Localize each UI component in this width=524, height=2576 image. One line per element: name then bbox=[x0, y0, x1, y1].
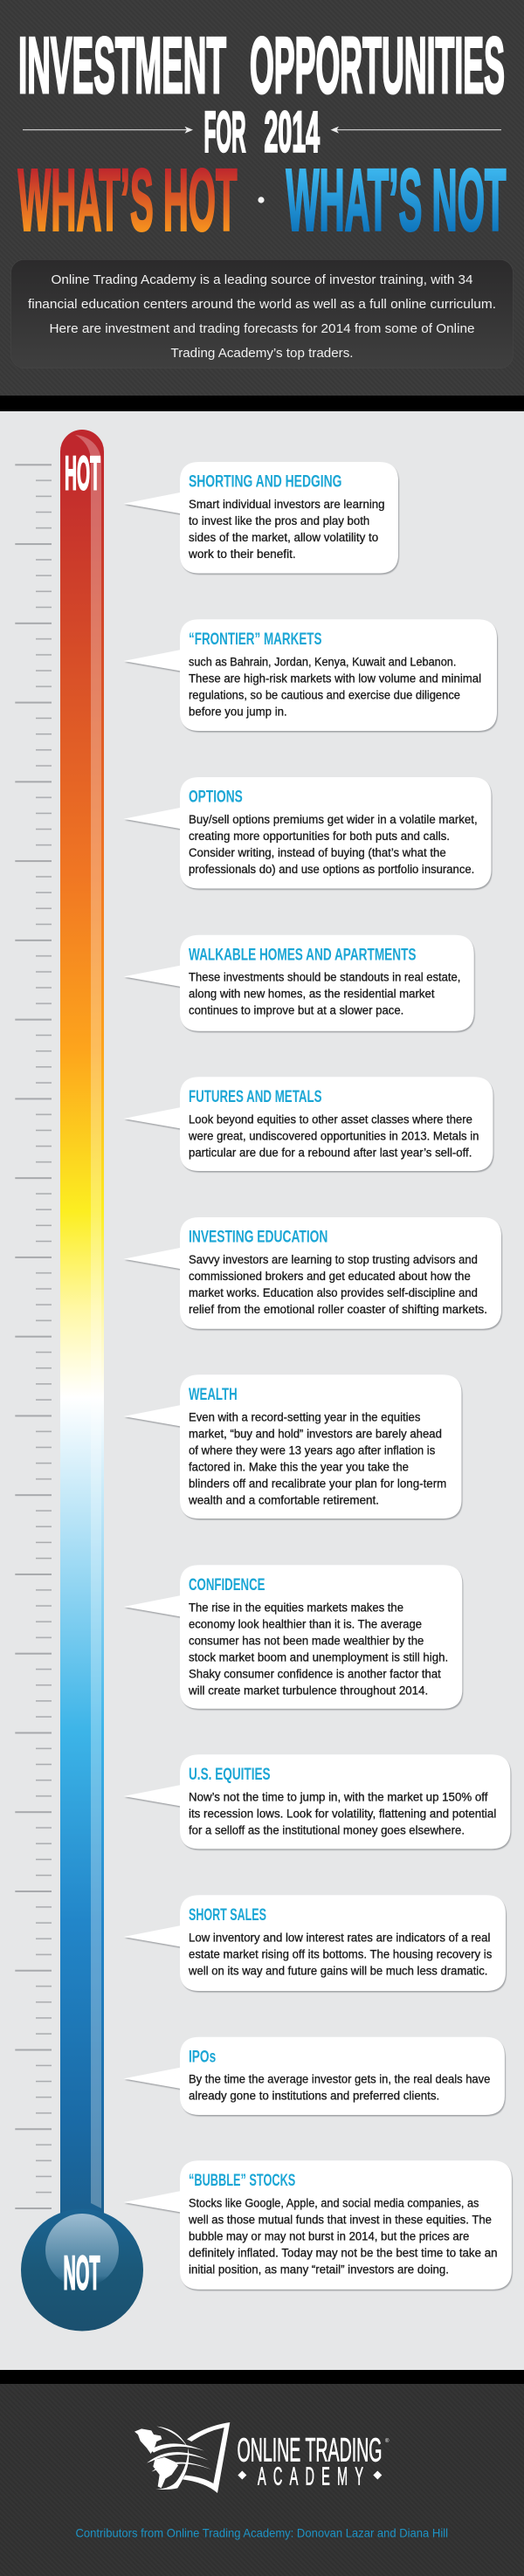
body: Even with a record-setting year in the equities bbox=[189, 1410, 421, 1423]
thermometer: NOT bbox=[63, 2247, 100, 2300]
bubble bbox=[124, 462, 398, 573]
logo subline: ACADEMY bbox=[258, 2462, 363, 2490]
body bbox=[188, 2196, 498, 2276]
body: Consider writing, instead of buying (that’s what the bbox=[189, 846, 446, 859]
bubble bbox=[124, 935, 474, 1031]
body: continues to improve but at a slower pace. bbox=[189, 1004, 403, 1017]
heading: SHORTING AND HEDGING bbox=[189, 473, 342, 492]
thermometer tube bbox=[60, 430, 104, 2227]
body: particular are due for a rebound after last year’s sell-off. bbox=[189, 1146, 472, 1159]
body: wealth and a comfortable retirement. bbox=[188, 1493, 379, 1506]
body bbox=[189, 2073, 490, 2103]
body: These investments should be standouts in real estate, bbox=[189, 971, 460, 984]
heading: CONFIDENCE bbox=[189, 1576, 265, 1595]
text: 2014 bbox=[264, 100, 320, 164]
body: work to their benefit. bbox=[188, 548, 296, 561]
body: professionals do) and use options as portfolio insurance. bbox=[189, 863, 474, 876]
body: These are high-risk markets with low volume and minimal bbox=[189, 672, 481, 685]
separator dot bbox=[258, 196, 265, 203]
callout: bubble stocks bbox=[124, 2160, 512, 2290]
bubble bbox=[124, 2037, 505, 2115]
body: of where they were 13 years ago after inflation is bbox=[189, 1443, 436, 1457]
body bbox=[189, 971, 460, 1017]
body: market works. Education also provides self-discipline and bbox=[189, 1286, 478, 1299]
body: Buy/sell options premiums get wider in a volatile market, bbox=[189, 813, 478, 826]
body: well on its way and future gains will be much less dramatic. bbox=[188, 1964, 487, 1977]
body: well as those mutual funds that invest in these equities. The bbox=[188, 2213, 492, 2226]
bubble bbox=[124, 1077, 493, 1171]
callout: investing education bbox=[124, 1217, 501, 1329]
body: Now’s not the time to jump in, with the market up 150% off bbox=[189, 1790, 488, 1803]
heading: U.S. EQUITIES bbox=[189, 1766, 271, 1784]
body: definitely inflated. Today may not be the best time to take an bbox=[189, 2246, 498, 2259]
bubble bbox=[124, 2160, 512, 2290]
body: The rise in the equities markets makes the bbox=[189, 1601, 403, 1614]
heading: SHORT SALES bbox=[189, 1906, 266, 1925]
intro panel bbox=[11, 259, 513, 368]
tube highlight bbox=[75, 435, 101, 2208]
heading: FUTURES AND METALS bbox=[189, 1088, 322, 1106]
body: along with new homes, as the residential market bbox=[189, 988, 435, 1001]
body: By the time the average investor gets in, the real deals have bbox=[189, 2073, 490, 2086]
title: investment opportunities: INVESTMENT bbox=[18, 22, 226, 110]
body bbox=[188, 498, 384, 561]
intro text: Trading Academy’s top traders. bbox=[171, 346, 353, 361]
bubble bbox=[124, 1217, 501, 1329]
contributors credit: Contributors from Online Trading Academy: Donovan Lazar and Diana Hill bbox=[75, 2526, 448, 2540]
body: its recession lows. Look for volatility, flattening and potential bbox=[189, 1807, 496, 1820]
body: initial position, as many “retail” investors are doing. bbox=[189, 2263, 449, 2276]
body: Shaky consumer confidence is another factor that bbox=[189, 1667, 441, 1680]
body: economy look healthier than it is. The average bbox=[189, 1617, 422, 1630]
callout: frontier markets bbox=[124, 619, 497, 731]
body: for a selloff as the institutional money goes elsewhere. bbox=[189, 1823, 465, 1836]
body: creating more opportunities for both puts and calls. bbox=[189, 830, 450, 843]
body: consumer has not been made wealthier by the bbox=[189, 1634, 424, 1647]
body bbox=[188, 1410, 446, 1506]
body: estate market rising off its bottoms. The housing recovery is bbox=[189, 1947, 493, 1960]
thermometer: HOT bbox=[65, 447, 100, 500]
heading: OPTIONS bbox=[189, 789, 243, 807]
header band bbox=[0, 0, 524, 411]
intro text bbox=[28, 272, 496, 361]
body: blinders off and recalibrate your plan for long-term bbox=[189, 1477, 446, 1490]
body bbox=[188, 1112, 479, 1159]
bubble bbox=[124, 1374, 461, 1519]
callout: futures and metals bbox=[124, 1077, 493, 1171]
body bbox=[189, 1253, 487, 1316]
body: sides of the market, allow volatility to bbox=[189, 531, 378, 544]
callout: wealth bbox=[124, 1374, 461, 1519]
diamond left bbox=[238, 2471, 246, 2480]
callout: short sales bbox=[124, 1895, 506, 1991]
body: Smart individual investors are learning bbox=[189, 498, 384, 511]
body: factored in. Make this the year you take the bbox=[189, 1460, 409, 1473]
thermometer bbox=[21, 430, 143, 2331]
body: were great, undiscovered opportunities in 2013. Metals in bbox=[188, 1129, 479, 1142]
body bbox=[188, 1601, 448, 1697]
logo: online trading academy bbox=[134, 2422, 390, 2493]
body: already gone to institutions and preferred clients. bbox=[189, 2090, 439, 2103]
bubble bbox=[124, 1565, 462, 1709]
heading: IPOs bbox=[189, 2048, 216, 2066]
thermometer bulb bbox=[21, 2209, 143, 2331]
callout: u.s. equities bbox=[124, 1754, 510, 1849]
intro text: Here are investment and trading forecasts for 2014 from some of Online bbox=[49, 321, 475, 336]
body bbox=[188, 1931, 493, 1977]
heading: INVESTING EDUCATION bbox=[189, 1229, 328, 1247]
bubble bbox=[124, 1754, 510, 1849]
callout: shorting and hedging bbox=[124, 462, 398, 573]
body: Look beyond equities to other asset classes where there bbox=[189, 1112, 472, 1126]
body: before you jump in. bbox=[189, 705, 287, 718]
body: commissioned brokers and get educated about how the bbox=[189, 1270, 471, 1283]
arrow: right bbox=[330, 127, 501, 134]
icon: open book and globe bbox=[134, 2422, 230, 2493]
subtitle: for 2014: FOR bbox=[204, 100, 246, 164]
callout: walkable homes and apartments bbox=[124, 935, 474, 1031]
logo wordmark: ONLINE TRADING bbox=[238, 2433, 383, 2469]
arrow: left bbox=[23, 127, 193, 134]
body: regulations, so be cautious and exercise due diligence bbox=[189, 688, 460, 701]
callout: confidence bbox=[124, 1565, 462, 1709]
bubble bbox=[124, 619, 497, 731]
body bbox=[189, 813, 478, 876]
bubble bbox=[124, 1895, 506, 1991]
bulb highlight bbox=[45, 2214, 119, 2287]
body: to invest like the pros and play both bbox=[189, 514, 369, 527]
bubble bbox=[124, 777, 491, 889]
registered mark: ® bbox=[385, 2438, 390, 2444]
callout: ipos bbox=[124, 2037, 505, 2115]
callout: options bbox=[124, 777, 491, 889]
body: stock market boom and unemployment is still high. bbox=[189, 1650, 448, 1663]
body bbox=[189, 655, 481, 718]
thermometer scale ticks bbox=[0, 464, 52, 2210]
body: relief from the emotional roller coaster of shifting markets. bbox=[189, 1303, 487, 1316]
diamond right bbox=[373, 2471, 382, 2480]
body: market, “buy and hold” investors are barely ahead bbox=[189, 1427, 442, 1440]
heading: “FRONTIER” MARKETS bbox=[189, 630, 322, 649]
body: such as Bahrain, Jordan, Kenya, Kuwait and Lebanon. bbox=[189, 655, 456, 668]
intro text: financial education centers around the world as well as a full online curriculum. bbox=[28, 297, 496, 312]
body bbox=[189, 1790, 496, 1836]
heading: “BUBBLE” STOCKS bbox=[189, 2172, 295, 2190]
page background bbox=[0, 411, 524, 2370]
heading: WEALTH bbox=[189, 1386, 238, 1404]
footer band bbox=[0, 2370, 524, 2576]
body: will create market turbulence throughout 2014. bbox=[188, 1684, 428, 1697]
body: Savvy investors are learning to stop trusting advisors and bbox=[189, 1253, 478, 1266]
body: Stocks like Google, Apple, and social media companies, as bbox=[189, 2196, 479, 2209]
intro text: Online Trading Academy is a leading source of investor training, with 34 bbox=[51, 272, 473, 287]
body: Low inventory and low interest rates are indicators of a real bbox=[189, 1931, 490, 1944]
heading: WALKABLE HOMES AND APARTMENTS bbox=[189, 946, 417, 964]
body: bubble may or may not burst in 2014, but the prices are bbox=[189, 2229, 469, 2242]
